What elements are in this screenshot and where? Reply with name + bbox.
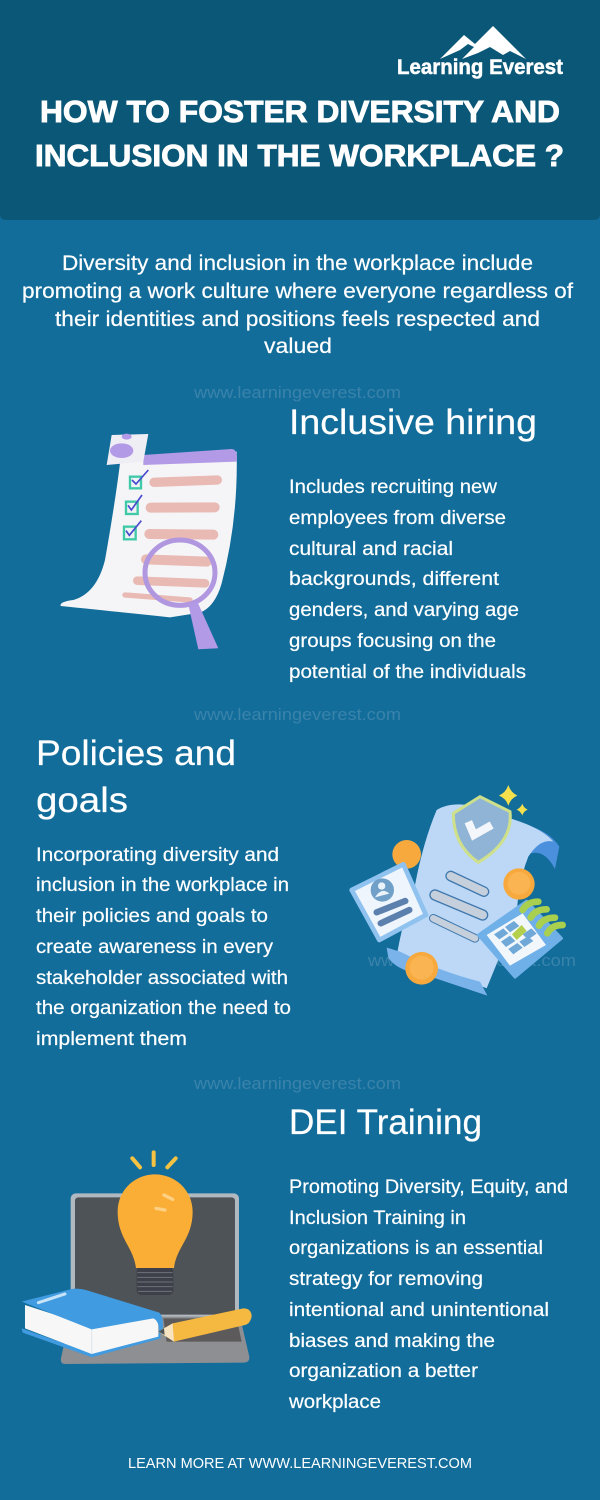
heading: Policies and goals xyxy=(36,734,236,820)
panel: DEI training xyxy=(22,1103,568,1413)
watermark 4: www.learningeverest.com xyxy=(367,952,576,970)
heading: DEI Training: DEI Training xyxy=(289,1103,482,1142)
panel: policies and goals xyxy=(36,734,563,1050)
text: DEI training description: biases and making the xyxy=(289,1331,495,1352)
text: policies description xyxy=(36,845,291,1050)
title: HOW TO FOSTER DIVERSITY AND xyxy=(40,94,560,129)
text: policies description: Incorporating diversity and xyxy=(36,845,279,866)
icon: policy document with shield xyxy=(352,785,563,996)
text: policies description: the organization the need to xyxy=(36,998,291,1019)
icon: checklist with magnifier xyxy=(61,434,237,649)
text: DEI training description: Promoting Diversity, Equity, and xyxy=(289,1177,568,1198)
text: policies description: inclusion in the workplace in xyxy=(36,875,289,896)
text: inclusive hiring description: Includes recruiting new xyxy=(289,477,497,498)
watermark 2: www.learningeverest.com xyxy=(193,706,401,724)
intro text: valued xyxy=(264,335,332,358)
text: DEI training description xyxy=(288,1177,568,1413)
watermark 3: www.learningeverest.com xyxy=(193,1075,401,1093)
text: policies description: their policies and goals to xyxy=(36,906,268,927)
text: inclusive hiring description xyxy=(289,477,526,683)
title xyxy=(35,94,564,173)
text: DEI training description: organizations is an essential xyxy=(289,1238,543,1259)
text: policies description: create awareness in every xyxy=(36,937,274,958)
text: inclusive hiring description: backgrounds, different xyxy=(289,569,500,590)
text: DEI training description: intentional and unintentional xyxy=(289,1300,549,1321)
text: policies description: implement them xyxy=(36,1029,187,1050)
text: inclusive hiring description: employees from diverse xyxy=(289,508,506,529)
text: inclusive hiring description: cultural and racial xyxy=(289,539,453,560)
intro text: Diversity and inclusion in the workplace include xyxy=(62,252,533,275)
heading: Policies and goals: Policies and xyxy=(36,734,236,773)
logo: Learning Everest xyxy=(397,26,563,79)
logo: Learning Everest: Learning Everest xyxy=(397,56,563,79)
text: inclusive hiring description: genders, and varying age xyxy=(289,600,519,621)
panel: header xyxy=(0,0,600,220)
intro text: promoting a work culture where everyone regardless of xyxy=(22,280,573,303)
text: DEI training description: Inclusion Training in xyxy=(289,1208,466,1229)
text: inclusive hiring description: groups focusing on the xyxy=(289,631,496,652)
watermark 1: www.learningeverest.com xyxy=(193,384,401,402)
title: INCLUSION IN THE WORKPLACE ? xyxy=(35,138,564,173)
heading: Policies and goals: goals xyxy=(36,781,128,820)
footer: LEARN MORE AT WWW.LEARNINGEVEREST.COM xyxy=(128,1455,472,1472)
text: DEI training description: workplace xyxy=(288,1392,381,1413)
text: DEI training description: strategy for removing xyxy=(289,1269,483,1290)
icon: laptop, light bulb, book and pencil xyxy=(22,1152,252,1364)
text: inclusive hiring description: potential of the individuals xyxy=(289,662,526,683)
intro text xyxy=(22,252,573,358)
panel: inclusive hiring xyxy=(61,403,537,683)
text: DEI training description: organization a better xyxy=(289,1361,479,1382)
heading: Inclusive hiring: Inclusive hiring xyxy=(289,403,537,442)
intro text: their identities and positions feels respected and xyxy=(55,308,540,331)
text: policies description: stakeholder associated with xyxy=(36,968,288,989)
